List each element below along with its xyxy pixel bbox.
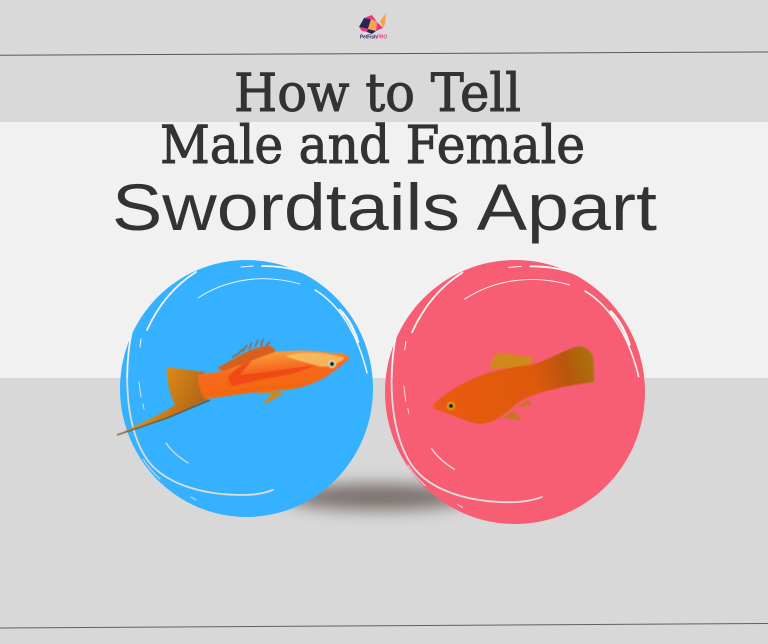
lower fins — [503, 400, 532, 420]
male fish — [117, 339, 350, 435]
female fish — [433, 346, 594, 424]
eye — [447, 402, 455, 410]
red stripe — [228, 361, 315, 386]
pink brush circle — [385, 260, 645, 524]
bottom divider line — [0, 624, 768, 628]
title — [112, 64, 657, 244]
head highlight — [285, 353, 345, 367]
logo: PetFishPRO — [359, 13, 387, 40]
blue brush circle — [120, 260, 373, 517]
panel: male swordtail — [117, 260, 373, 517]
title line 2: Male and Female — [160, 116, 585, 176]
body and tail — [433, 346, 594, 424]
top divider line — [0, 52, 768, 55]
title line 1: How to Tell — [234, 64, 521, 124]
ventral fins — [250, 391, 285, 405]
dorsal fin — [217, 339, 275, 374]
tail and sword — [117, 367, 212, 435]
panel: female swordtail — [385, 260, 645, 524]
logo: PetFishPRO: PetFishPRO — [360, 34, 387, 40]
ground shadow between circles — [286, 484, 470, 510]
title line 3: Swordtails Apart — [112, 170, 657, 244]
eye — [328, 360, 336, 368]
dorsal fin — [490, 353, 534, 369]
body — [198, 351, 350, 399]
